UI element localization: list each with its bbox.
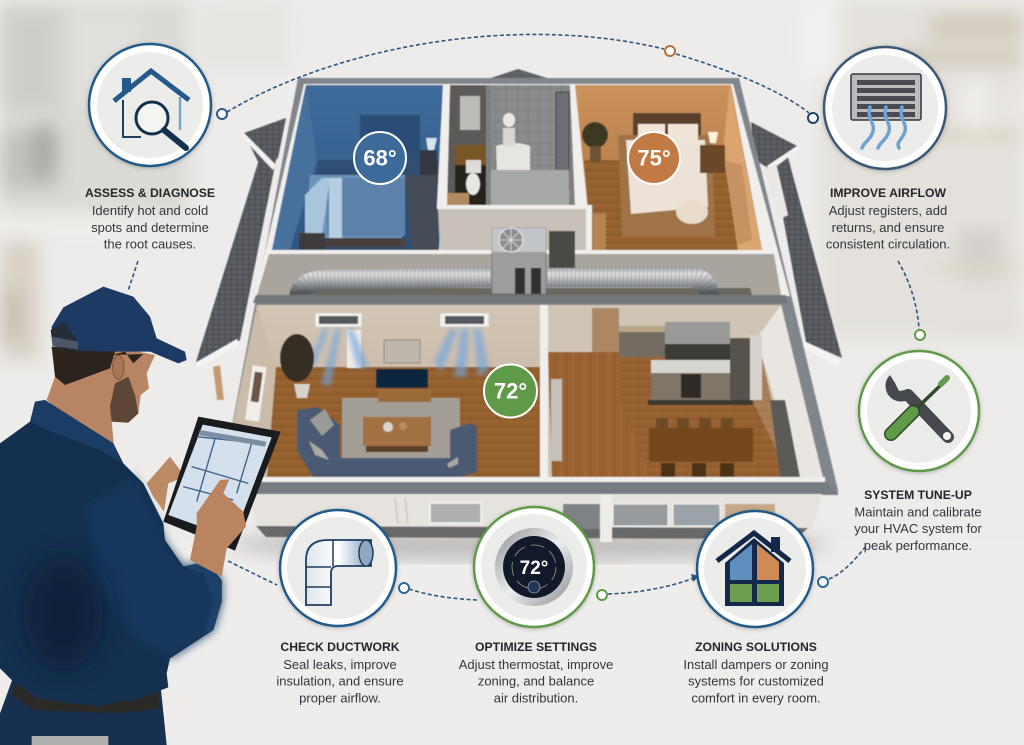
room: blue bedroom <box>272 85 443 250</box>
icon: house with magnifier <box>89 44 211 166</box>
rug <box>342 398 460 459</box>
description: spots and determine <box>91 220 209 235</box>
tv <box>376 369 431 402</box>
shirt sleeve <box>87 477 222 658</box>
cap <box>51 287 187 363</box>
trousers and belt <box>0 677 167 745</box>
temperature badge: 75: 75° <box>637 146 671 170</box>
room: kitchen and dining <box>548 305 823 478</box>
technician with tablet <box>0 287 281 745</box>
heading: SYSTEM TUNE-UP <box>864 488 972 502</box>
description: proper airflow. <box>299 690 381 706</box>
description: systems for customized <box>688 674 824 688</box>
icon: zoned house <box>697 511 813 627</box>
room: orange bedroom <box>575 85 762 250</box>
outer walls <box>220 78 838 495</box>
heading: ASSESS & DIAGNOSE <box>85 186 215 200</box>
shirt <box>0 400 222 703</box>
description: peak performance. <box>864 538 972 553</box>
icon: vent with air <box>824 47 946 169</box>
room: living room <box>222 305 541 478</box>
connector arrows <box>128 34 925 600</box>
description: Maintain and calibrate <box>854 504 982 520</box>
step: check ductwork <box>276 510 404 706</box>
icon: wrench and screwdriver <box>859 351 979 471</box>
partition walls <box>437 85 592 253</box>
description: returns, and ensure <box>832 220 944 235</box>
temperature badge: 68: 68° <box>363 146 397 170</box>
floor edge <box>225 477 825 482</box>
step: optimize settings <box>459 507 613 706</box>
shirt cuff and arm edge <box>183 562 222 635</box>
roof: left slope <box>195 118 286 405</box>
collar <box>31 400 123 463</box>
room: bathroom <box>447 85 575 205</box>
heading: OPTIMIZE SETTINGS <box>475 640 597 654</box>
description: Seal leaks, improve <box>283 657 397 672</box>
description: Identify hot and cold <box>92 203 208 218</box>
air streams <box>303 329 489 385</box>
dining table <box>649 418 753 477</box>
icon: duct elbow <box>280 510 396 626</box>
step: improve airflow <box>824 47 950 252</box>
temperature badge: 72 <box>484 364 537 418</box>
shirt shadow <box>23 557 103 670</box>
roof gable <box>488 69 550 79</box>
step: zoning solutions <box>683 511 829 706</box>
heading: CHECK DUCTWORK <box>280 640 400 654</box>
temperature badge: 72: 72° <box>494 378 527 404</box>
head and neck <box>47 347 155 447</box>
description: consistent circulation. <box>826 236 950 252</box>
step: system tune-up <box>854 351 982 553</box>
hallway <box>257 250 781 295</box>
ducts <box>299 277 710 300</box>
roof: right slope <box>751 122 842 367</box>
icon: thermostat <box>474 507 594 627</box>
description: Adjust registers, add <box>829 203 947 218</box>
front hand <box>190 479 246 577</box>
front facade <box>250 494 822 542</box>
description: your HVAC system for <box>854 521 982 536</box>
description: Adjust thermostat, improve <box>459 657 613 672</box>
description: comfort in every room. <box>691 690 821 706</box>
description: the root causes. <box>104 236 196 252</box>
heading: IMPROVE AIRFLOW <box>830 186 946 200</box>
description: Install dampers or zoning <box>683 657 829 672</box>
plant <box>280 334 314 398</box>
house cutaway <box>195 69 842 542</box>
wall unit <box>384 340 420 363</box>
sofa <box>297 407 477 477</box>
description: insulation, and ensure <box>276 674 404 688</box>
counters <box>619 322 762 405</box>
step: assess and diagnose <box>85 44 215 252</box>
coffee table <box>363 417 431 452</box>
temperature badge: 68 <box>354 132 406 184</box>
icon: thermostat: 72° <box>520 558 548 579</box>
divider <box>540 305 548 479</box>
heading: ZONING SOLUTIONS <box>695 640 817 654</box>
tablet <box>163 417 281 551</box>
description: air distribution. <box>494 690 578 706</box>
HVAC unit <box>492 228 575 294</box>
mid floor band <box>253 295 788 303</box>
temperature badge: 75 <box>628 132 680 184</box>
mini-split registers <box>315 313 489 327</box>
description: zoning, and balance <box>478 674 594 688</box>
back hand <box>147 457 185 512</box>
